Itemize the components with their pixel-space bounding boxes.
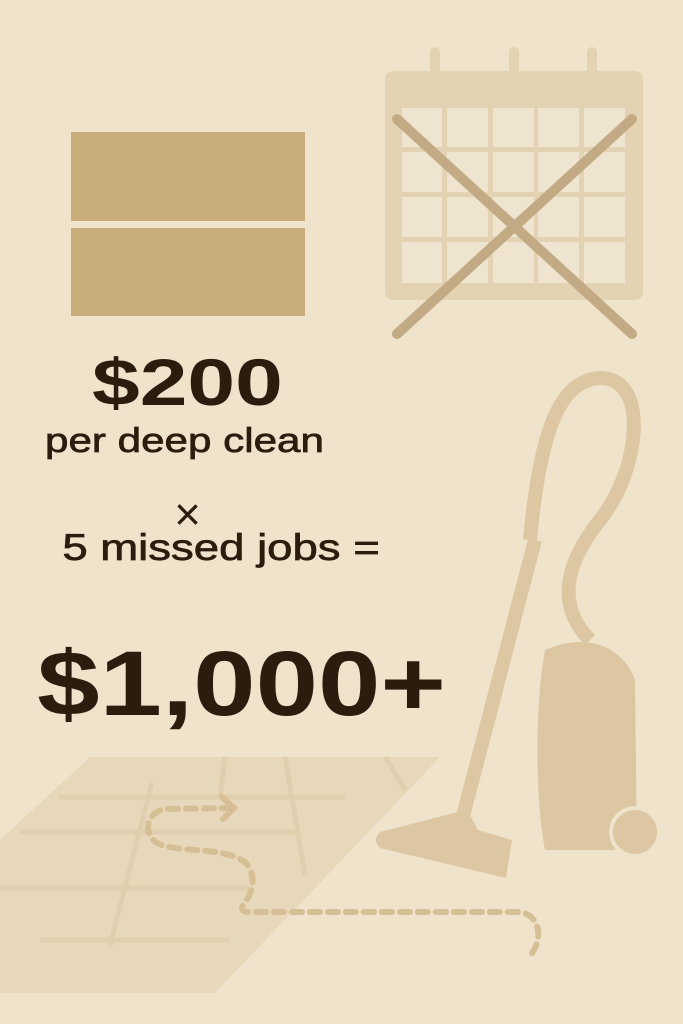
text: $200: $200: [92, 345, 283, 419]
icon: dashed path: [148, 797, 538, 958]
icon: calendar with X: [385, 52, 643, 334]
text: 5 missed jobs: 5 missed jobs =: [62, 527, 380, 568]
icon: floor tiles: [0, 757, 440, 993]
icon: vacuum cleaner: [376, 378, 659, 878]
text: total $1,000+: $1,000+: [37, 633, 446, 735]
text: multiply sign: ×: [174, 488, 201, 540]
icon: brown box: [71, 132, 305, 316]
text: per deep clean: per deep clean: [45, 422, 323, 460]
